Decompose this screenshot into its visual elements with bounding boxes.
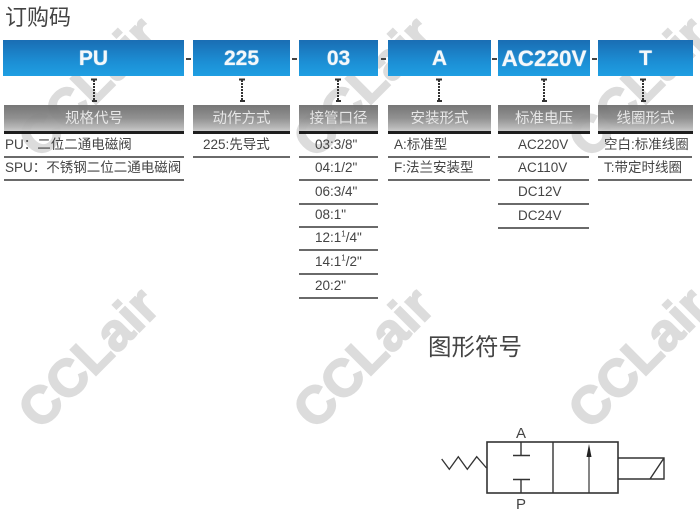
separator — [381, 58, 386, 60]
header: model code — [4, 105, 184, 134]
header: port size: 接管口径 — [310, 111, 368, 127]
heading: graphic symbol: 图形符号 — [428, 334, 522, 360]
list: voltage: AC110V — [518, 160, 567, 175]
header: mounting — [388, 105, 491, 134]
header: actuation — [193, 105, 290, 134]
solenoid — [618, 458, 664, 479]
separator — [492, 58, 497, 60]
list: coil — [598, 137, 692, 181]
header: actuation: 动作方式 — [212, 111, 270, 127]
watermarks: CCLair — [7, 6, 170, 168]
watermarks: CCLair — [282, 277, 445, 439]
watermarks: CCLair — [282, 6, 445, 168]
list: port size: 12:11/4" — [315, 230, 362, 245]
list: port size: 08:1" — [315, 207, 346, 222]
list: port size: 06:3/4" — [315, 184, 357, 199]
title: ordering code: 订购码 — [5, 5, 71, 30]
port label A: A — [516, 425, 526, 442]
code box: PU — [3, 40, 184, 76]
code box: A: A — [432, 47, 447, 70]
list: voltage: DC24V — [518, 208, 562, 223]
code box: AC220V — [498, 40, 590, 76]
header: port size — [299, 105, 378, 134]
list: voltage — [498, 137, 589, 229]
closed port A — [513, 442, 530, 456]
list: mounting: F:法兰安装型 — [394, 160, 474, 175]
header: model code: 规格代号 — [65, 111, 123, 127]
separator — [292, 58, 297, 60]
header: coil: 线圈形式 — [616, 111, 674, 127]
header: mounting: 安装形式 — [410, 111, 468, 127]
list: mounting: A:标准型 — [394, 137, 447, 152]
header: coil — [598, 105, 693, 134]
closed port P — [513, 480, 530, 493]
header: voltage — [498, 105, 590, 134]
list: port size: 03:3/8" — [315, 137, 357, 152]
separator — [592, 58, 597, 60]
list: port size: 04:1/2" — [315, 160, 357, 175]
list: model code: PU：二位二通电磁阀 — [5, 137, 132, 152]
list: model code — [4, 137, 184, 181]
list: actuation: 225:先导式 — [203, 137, 270, 152]
flow arrow — [588, 450, 590, 493]
list: model code: SPU：不锈钢二位二通电磁阀 — [5, 160, 181, 175]
code box: 225 — [193, 40, 290, 76]
code box: 03: 03 — [327, 47, 350, 70]
list: port size: 20:2" — [315, 278, 346, 293]
list: port size: 14:11/2" — [315, 254, 362, 269]
code box: T: T — [639, 47, 652, 70]
list: voltage: AC220V — [518, 137, 568, 152]
code box: PU: PU — [79, 47, 108, 70]
separator — [186, 58, 191, 60]
list: coil: T:带定时线圈 — [604, 160, 682, 175]
list: coil: 空白:标准线圈 — [604, 137, 689, 152]
code box: AC220V: AC220V — [501, 46, 587, 71]
list: port size — [299, 137, 378, 299]
valve body — [487, 442, 618, 493]
code box: T — [598, 40, 693, 76]
code box: A — [388, 40, 491, 76]
spring — [442, 457, 486, 469]
list: voltage: DC12V — [518, 184, 562, 199]
header: voltage: 标准电压 — [515, 111, 573, 127]
code box: 225: 225 — [224, 47, 259, 70]
list: mounting — [388, 137, 490, 181]
code box: 03 — [299, 40, 378, 76]
watermarks: CCLair — [7, 277, 170, 439]
